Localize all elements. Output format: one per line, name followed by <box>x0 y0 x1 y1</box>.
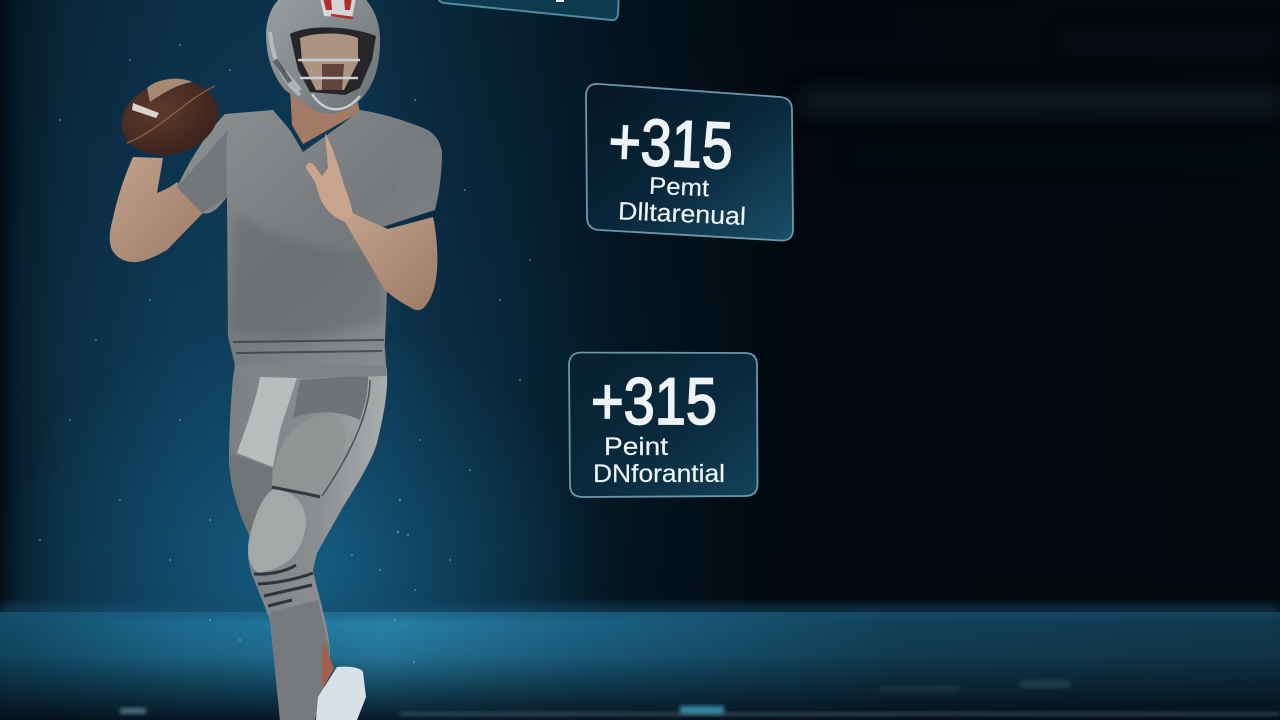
player: jersey <box>177 110 442 365</box>
card: cropped stat card at top <box>438 0 619 20</box>
player: towel <box>237 377 297 467</box>
stat card: upper +315 point differential <box>586 84 793 241</box>
player: shoe <box>316 667 366 720</box>
player: ankle <box>322 640 334 690</box>
player: neck <box>290 90 360 144</box>
stat card: lower +315 point differential <box>569 352 758 497</box>
player: non-throwing arm <box>345 213 437 310</box>
floor: glowing blue band <box>0 604 1280 720</box>
particles: dust specks <box>39 44 531 663</box>
player: football <box>113 71 227 165</box>
player: waist folds <box>234 348 387 378</box>
player: quarterback in throwing pose <box>110 0 442 720</box>
stat label line 2: DNforantial <box>593 460 725 488</box>
player: hand <box>306 133 353 222</box>
player: throwing arm <box>110 157 203 262</box>
stat label line 1: Pemt <box>649 173 710 202</box>
player: helmet <box>266 0 380 114</box>
player: legs <box>229 353 387 720</box>
stat label line 2: Dlltarenual <box>617 197 747 231</box>
stat value: +315 <box>607 103 734 183</box>
stat value: +315 <box>591 364 717 438</box>
stat label line 1: Peint <box>604 433 668 461</box>
